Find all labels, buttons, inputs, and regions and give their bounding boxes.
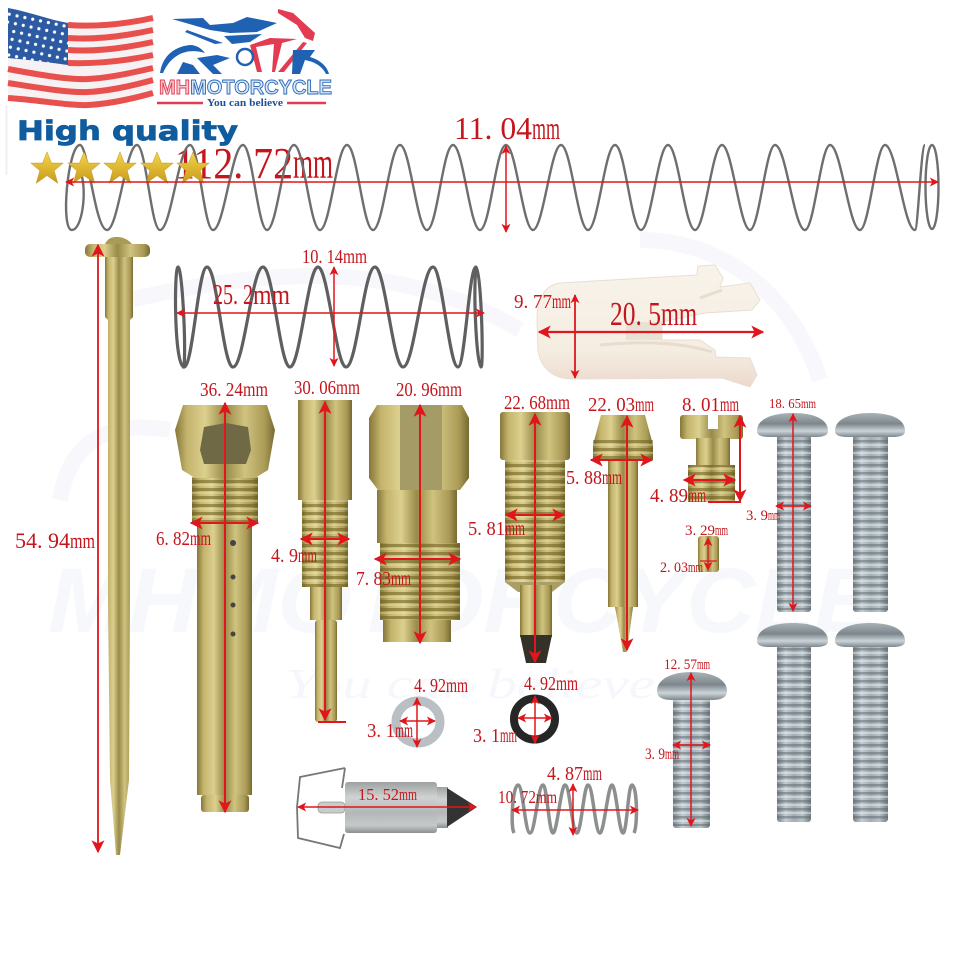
icons: rating stars bbox=[31, 152, 209, 183]
part: mixture screw 22.68mm: 5. 81mm bbox=[468, 518, 525, 540]
part: small brass sleeve bbox=[660, 523, 728, 576]
part: needle jet 30.06mm bbox=[271, 377, 360, 722]
part: main jet 20.96mm bbox=[356, 379, 469, 643]
part: slotted jet 8.01mm bbox=[650, 394, 743, 507]
part: pilot jet 36.24mm: 36. 24mm bbox=[200, 379, 268, 401]
watermark logo bbox=[48, 240, 881, 708]
logo: MH Motorcycle bbox=[157, 9, 332, 109]
part: long needle bbox=[15, 237, 150, 855]
watermark logo: You can believe bbox=[285, 662, 655, 708]
logo: MH Motorcycle: You can believe bbox=[207, 97, 283, 109]
logo: MH Motorcycle: MHMOTORCYCLE bbox=[159, 77, 332, 99]
part: tapered needle 22.03mm: 22. 03mm bbox=[588, 394, 654, 416]
part: main jet 20.96mm: 20. 96mm bbox=[396, 379, 462, 401]
heading: High quality: High quality bbox=[17, 116, 238, 147]
medium spring bbox=[176, 246, 484, 367]
part: small spring bbox=[498, 763, 638, 835]
watermark logo: MHMOTORCYCLE bbox=[48, 550, 881, 652]
part: O-ring bbox=[473, 673, 578, 747]
part: O-ring: 3. 1mm bbox=[473, 725, 517, 747]
part: small brass sleeve: 2. 03mm bbox=[660, 560, 703, 576]
long spring bbox=[66, 145, 939, 230]
icon: US flag bbox=[6, 8, 153, 175]
part: small spring: 4. 87mm bbox=[547, 763, 602, 785]
part: slotted jet 8.01mm: 4. 89mm bbox=[650, 485, 706, 507]
dimension: long spring: 11. 04mm bbox=[454, 110, 560, 146]
part: float valve: 15. 52mm bbox=[358, 785, 417, 804]
part: washer: 4. 92mm bbox=[414, 675, 468, 697]
part: tapered needle 22.03mm: 5. 88mm bbox=[566, 467, 622, 489]
part: needle jet 30.06mm: 4. 9mm bbox=[271, 545, 317, 567]
part: screw lower right bbox=[835, 623, 905, 822]
part: float valve bbox=[297, 768, 477, 848]
part: long needle: 54. 94mm bbox=[15, 528, 95, 553]
part: tapered needle 22.03mm bbox=[566, 394, 654, 652]
part: mixture screw 22.68mm: 22. 68mm bbox=[504, 392, 570, 414]
part: white plastic clip: 9. 77mm bbox=[514, 291, 571, 313]
part: O-ring: 4. 92mm bbox=[524, 673, 578, 695]
part: screw 18.65mm: 3. 9mm bbox=[746, 508, 780, 524]
medium spring: 25. 2mm bbox=[213, 280, 290, 311]
medium spring: 10. 14mm bbox=[302, 246, 367, 268]
part: small screw 12.57mm: 3. 9mm bbox=[645, 746, 679, 763]
label: 112.72mm: 112. 72mm bbox=[175, 139, 333, 188]
part: screw 18.65mm bbox=[746, 397, 828, 612]
part: small brass sleeve: 3. 29mm bbox=[685, 523, 728, 539]
part: pilot jet 36.24mm: 6. 82mm bbox=[156, 528, 211, 550]
part: needle jet 30.06mm: 30. 06mm bbox=[294, 377, 360, 399]
part: washer bbox=[367, 675, 468, 747]
part: slotted jet 8.01mm: 8. 01mm bbox=[682, 394, 739, 416]
part: screw top right bbox=[835, 413, 905, 612]
part: small screw 12.57mm: 12. 57mm bbox=[664, 657, 710, 673]
part: washer: 3. 1mm bbox=[367, 720, 413, 742]
part: pilot jet 36.24mm bbox=[156, 379, 275, 812]
part: white plastic clip: 20. 5mm bbox=[610, 296, 697, 333]
part: small spring: 10. 72mm bbox=[498, 787, 557, 807]
part: screw 18.65mm: 18. 65mm bbox=[769, 397, 816, 412]
part: mixture screw 22.68mm bbox=[468, 392, 570, 663]
part: white plastic clip bbox=[514, 265, 763, 387]
part: main jet 20.96mm: 7. 83mm bbox=[356, 568, 411, 590]
part: small screw 12.57mm bbox=[645, 657, 727, 828]
part: screw lower middle bbox=[757, 623, 828, 822]
